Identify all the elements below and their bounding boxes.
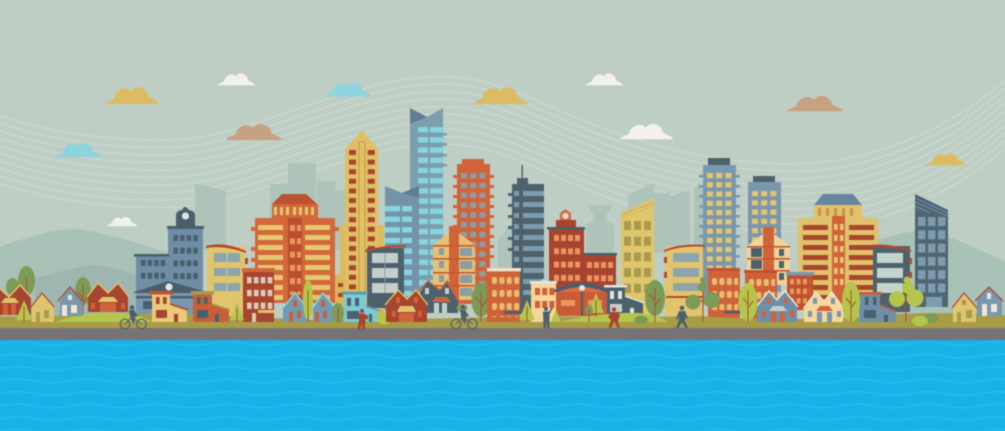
clouds <box>55 74 966 226</box>
house: light blue block <box>342 292 380 322</box>
building: blue clock tower office <box>134 207 204 322</box>
building: orange brick walk-up centre <box>487 268 521 322</box>
building: second blue tower <box>748 176 781 292</box>
building: yellow high-rise with red bands <box>798 194 878 308</box>
building: dark slanted tower <box>915 194 948 307</box>
round tree green <box>686 277 720 322</box>
house: blue gable left <box>58 287 82 316</box>
cyclist left <box>120 305 146 329</box>
building: yellow curved roof right <box>664 245 705 316</box>
trees left-centre <box>16 280 344 323</box>
house: cream pair right <box>803 292 844 322</box>
building: tall yellow pointed tower <box>335 130 385 320</box>
person dark centre <box>543 307 553 328</box>
water <box>0 340 1005 431</box>
bush light <box>376 314 392 324</box>
green hill centre-right <box>560 313 668 322</box>
building: yellow slanted tower <box>621 198 654 320</box>
building: orange window tower <box>453 159 494 304</box>
house: blue pair right <box>756 291 798 322</box>
building: red brick walk-up <box>242 268 275 322</box>
building: yellow low block <box>149 291 188 322</box>
distant city silhouettes <box>195 163 703 280</box>
building: cream walk-up <box>530 278 557 322</box>
house: dark pair centre <box>418 281 458 313</box>
building: yellow condo centre <box>433 226 475 306</box>
building: dark lean-to block <box>604 285 644 317</box>
person walking right <box>676 306 688 328</box>
house: red pair left <box>87 283 129 312</box>
house: yellow gable left <box>31 293 54 322</box>
bushes right <box>912 313 938 326</box>
building: glass tower <box>410 108 447 290</box>
round tree light right <box>889 276 924 322</box>
building: lower glass tower <box>385 186 419 310</box>
house: blue gable right <box>975 287 1003 316</box>
building: blue tower with yellow windows <box>699 158 740 305</box>
cyclist centre <box>451 304 477 329</box>
tree centre <box>472 283 490 322</box>
building: brick block pair right <box>707 268 777 322</box>
building: blue lean-to right <box>857 292 897 322</box>
building: orange low block <box>191 291 230 322</box>
building: dark curved roof office <box>870 245 912 312</box>
building: yellow curved roof left <box>206 244 248 322</box>
building: brick dome office <box>547 209 617 299</box>
trees back left <box>6 266 91 316</box>
trees centre-right <box>519 280 665 324</box>
building: cream condo right <box>747 227 790 285</box>
green hill left <box>55 313 152 322</box>
road <box>0 328 1005 340</box>
house: red pair far left <box>0 284 31 315</box>
wavy sky lines <box>0 76 1005 232</box>
ground <box>0 313 1005 328</box>
house: red pair centre <box>385 290 428 322</box>
distant mountains <box>0 229 1005 330</box>
house: yellow gable right <box>952 293 977 322</box>
building: dark glazed office <box>365 245 406 308</box>
building: red low block right <box>786 272 814 310</box>
person red left <box>358 309 368 330</box>
house: blue pair centre-left <box>282 293 334 322</box>
trees light right <box>738 282 860 322</box>
building: orange slab high-rise <box>251 194 339 308</box>
building: dark spire tower <box>508 165 544 314</box>
building: arched civic block <box>554 282 609 316</box>
person red right <box>608 307 620 328</box>
